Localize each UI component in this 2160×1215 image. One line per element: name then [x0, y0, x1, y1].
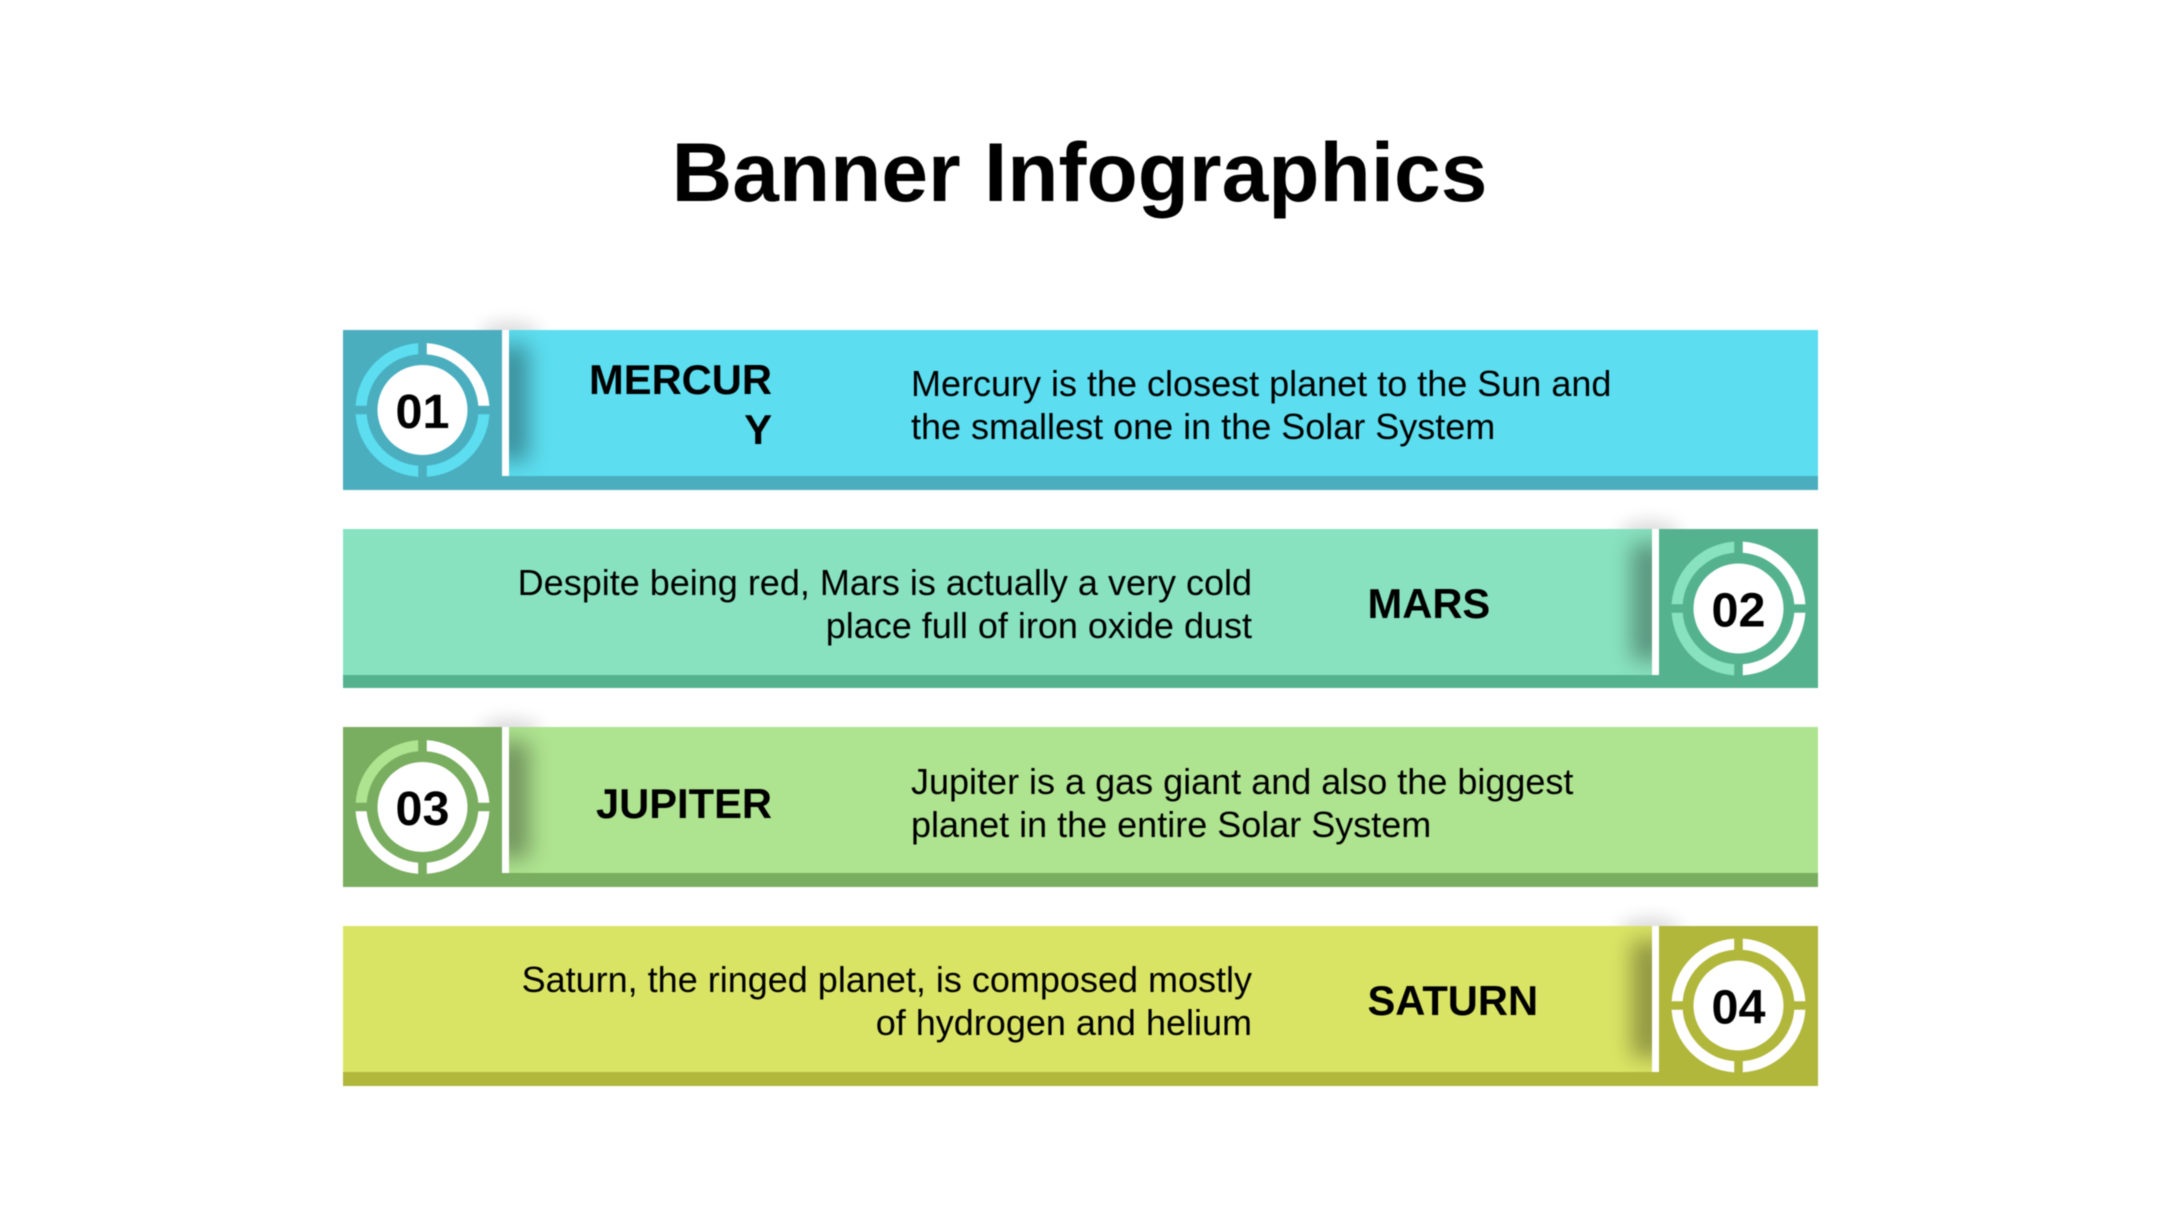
heading: Mercury	[589, 356, 772, 453]
panel: Saturn banner	[343, 919, 1818, 1086]
icon: Mars number badge: 02	[1712, 584, 1765, 638]
text: Saturn description	[522, 959, 1252, 1043]
panel: Mercury banner	[343, 323, 1818, 490]
icon: Mercury number badge: 01	[396, 385, 449, 439]
text: Jupiter description	[911, 761, 1573, 845]
text: Mercury description	[911, 363, 1611, 447]
text: Mars description: place full of iron oxide dust	[826, 605, 1252, 646]
panel: Jupiter banner	[343, 720, 1818, 887]
text: Mars description	[518, 562, 1252, 646]
heading: Mercury: MERCUR	[589, 356, 772, 403]
icon: Jupiter number badge	[356, 740, 489, 874]
heading: Saturn: SATURN	[1368, 977, 1538, 1024]
panel: Mars banner	[343, 522, 1818, 688]
heading: Mars: MARS	[1368, 580, 1490, 627]
heading: Mercury: Y	[744, 406, 772, 453]
text: Saturn description: Saturn, the ringed planet, is composed mostly	[522, 959, 1252, 1000]
icon: Saturn number badge: 04	[1712, 980, 1765, 1034]
icon: Jupiter number badge: 03	[396, 782, 449, 836]
heading: Jupiter: JUPITER	[596, 780, 772, 827]
icon: Mars number badge	[1672, 542, 1805, 675]
text: Mercury description: the smallest one in the Solar System	[911, 406, 1495, 447]
text: Mars description: Despite being red, Mars is actually a very cold	[518, 562, 1252, 603]
title: Banner Infographics	[672, 125, 1487, 219]
icon: Mercury number badge	[356, 343, 489, 477]
text: Jupiter description: Jupiter is a gas giant and also the biggest	[911, 761, 1573, 802]
text: Jupiter description: planet in the entire Solar System	[911, 804, 1431, 845]
text: Mercury description: Mercury is the closest planet to the Sun and	[911, 363, 1611, 404]
text: Saturn description: of hydrogen and helium	[876, 1002, 1252, 1043]
icon: Saturn number badge	[1672, 939, 1805, 1072]
